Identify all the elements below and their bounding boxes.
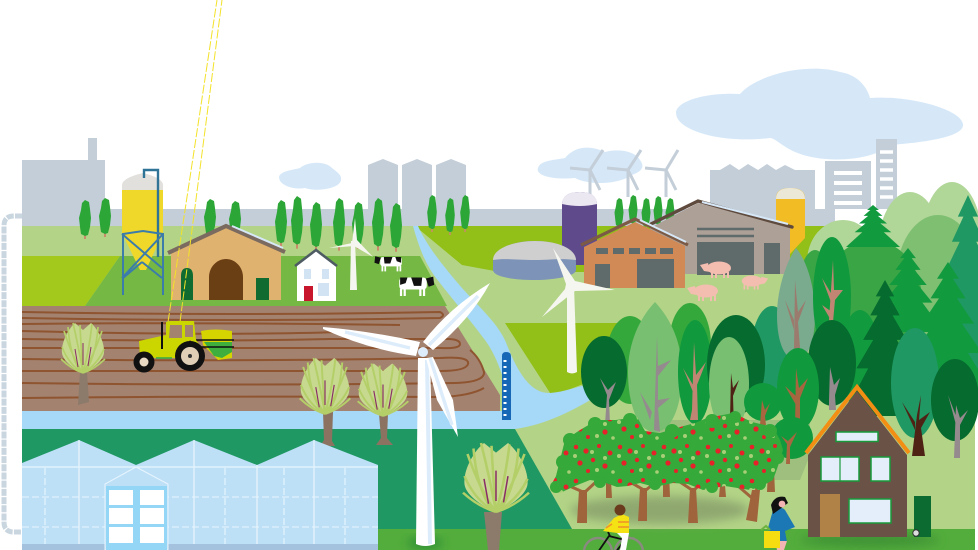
barn: orange shed	[581, 219, 688, 288]
water level gauge	[502, 352, 511, 420]
panel: ground layer	[22, 209, 975, 550]
barn: tan farmhouse	[168, 226, 285, 300]
house: brown family home	[800, 387, 940, 547]
pollard willow: field centre	[300, 358, 350, 446]
pigs	[687, 262, 768, 301]
background wind turbines	[570, 150, 678, 197]
willow: foreground	[463, 443, 529, 550]
front trees	[606, 316, 654, 404]
tractor laser beams	[168, 0, 222, 322]
yellow silo	[776, 188, 805, 254]
small wind turbine	[329, 218, 373, 290]
back trees	[807, 182, 978, 308]
pollard willow: field left	[61, 323, 105, 405]
barn: grey stable	[650, 201, 792, 275]
poplar row	[79, 195, 674, 252]
purple silo	[562, 192, 597, 265]
river and canal	[22, 226, 600, 429]
greenhouse	[22, 440, 378, 550]
forest	[581, 182, 978, 480]
wind turbine: middle	[542, 248, 615, 374]
silos: grey background	[368, 159, 466, 209]
orchard	[550, 411, 784, 524]
field furrows	[22, 312, 484, 398]
tractor	[134, 321, 234, 372]
cloud: large	[676, 69, 963, 159]
biogas tank	[493, 241, 576, 280]
cyclist	[584, 504, 643, 550]
pollard willow: field right	[358, 364, 408, 445]
tower building	[876, 139, 897, 209]
cloud: small left	[279, 163, 341, 190]
office building	[825, 161, 871, 209]
cloud: behind turbines	[538, 148, 642, 183]
pipe: left side	[4, 216, 22, 532]
woman with shopping bag	[761, 497, 795, 550]
factory: right	[710, 164, 815, 209]
tower silo	[122, 170, 163, 295]
large wind turbine	[323, 283, 490, 549]
cows	[374, 256, 434, 296]
house: small white	[295, 250, 337, 301]
factory: left	[22, 138, 105, 226]
wheelie bin	[913, 496, 931, 537]
